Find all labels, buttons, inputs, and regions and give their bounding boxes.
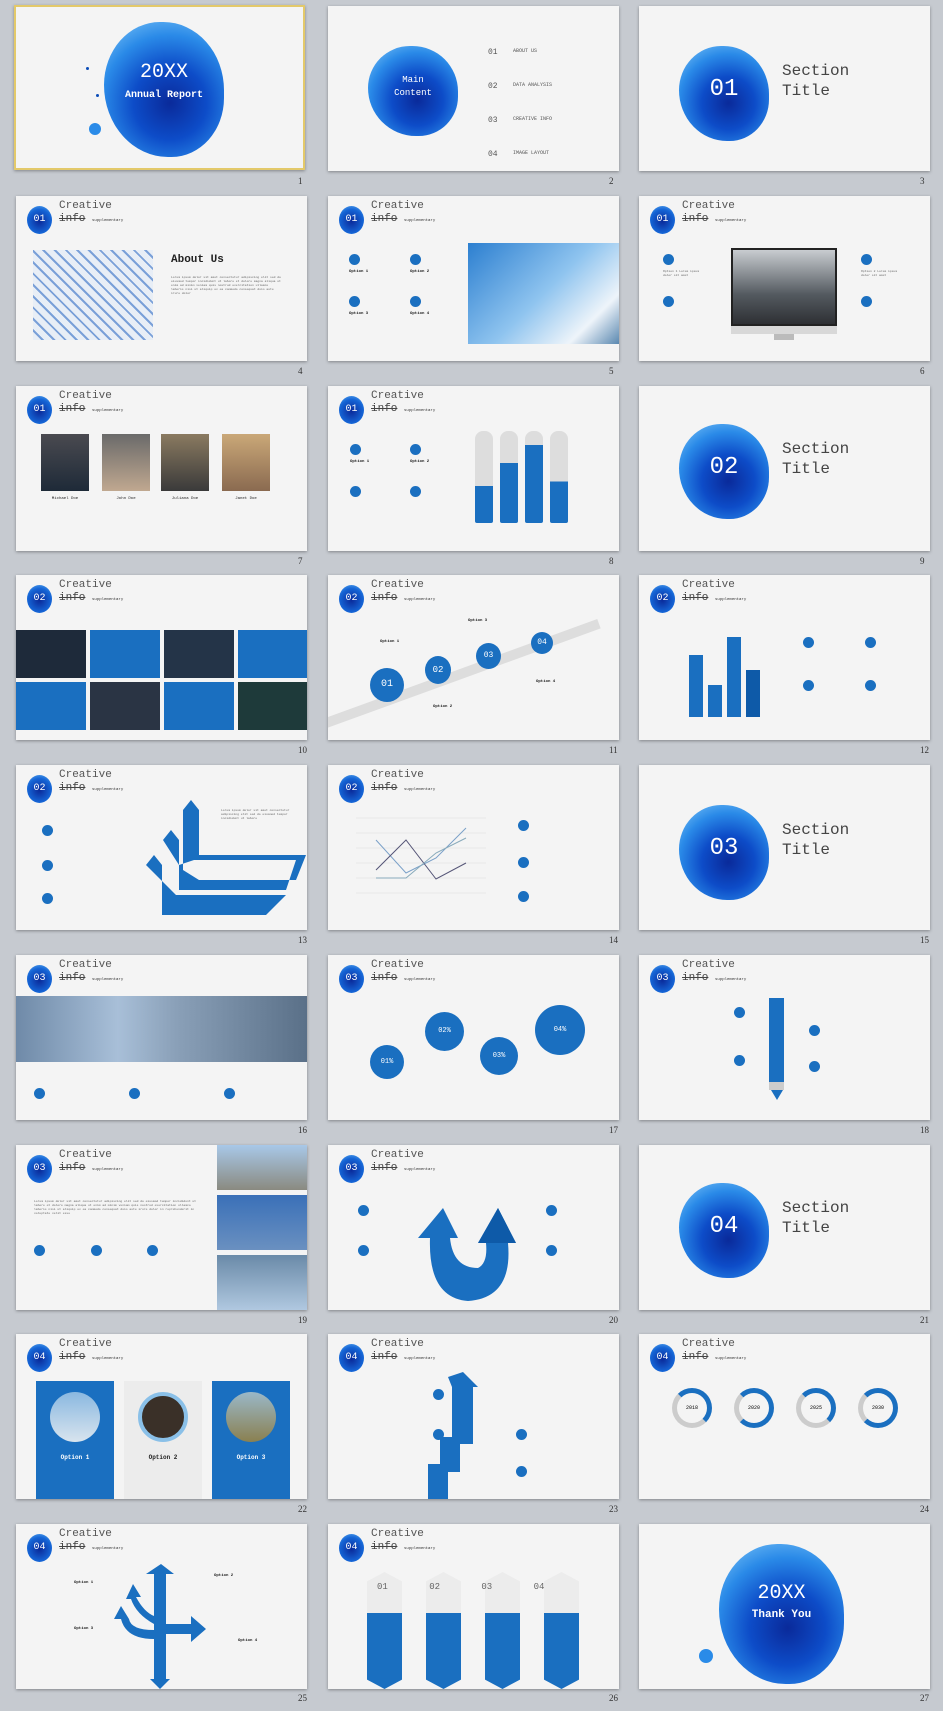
slide 5: info supplementary <box>371 213 435 225</box>
text: 6 <box>920 366 924 376</box>
slide 14: line chart: info supplementary <box>371 782 435 794</box>
slide 18: pencil <box>639 955 930 1120</box>
slide 12: bar chart: 02 <box>656 593 668 604</box>
text: 11 <box>609 745 618 755</box>
contents list <box>488 48 498 159</box>
slide 23: stairs: Creative <box>371 1338 424 1350</box>
text: 22 <box>298 1504 307 1514</box>
slide 24: rings <box>639 1334 930 1499</box>
slide 20: circular arrow: Creative <box>371 1149 424 1161</box>
slide 17: percentage blobs: 01% <box>381 1058 393 1066</box>
slide 22: cards: Creative <box>59 1338 112 1350</box>
slide 24: rings: Creative <box>682 1338 735 1350</box>
contents list: 04 <box>488 150 498 159</box>
title text: 20XX <box>140 61 188 84</box>
slide 25: pencil arrows: info supplementary <box>59 1541 123 1553</box>
text: 25 <box>298 1693 307 1703</box>
slide 20: circular arrow <box>328 1145 619 1310</box>
names: Michael Doe <box>52 497 78 501</box>
slide 11: timeline circles: Option 1 <box>380 640 399 644</box>
slide 26: banners: Creative <box>371 1528 424 1540</box>
blob head <box>104 22 224 157</box>
slide 11: timeline circles: Option 2 <box>433 705 452 709</box>
slide 7: info supplementary <box>59 403 123 415</box>
slide 22: cards: Option 1 <box>61 1454 89 1461</box>
slide 10: photo grid: info supplementary <box>59 592 123 604</box>
slide 2: contents: DATA ANALYSIS <box>513 82 552 88</box>
slide 3: section 01: Section <box>782 62 849 80</box>
text: 3 <box>920 176 924 186</box>
slide 5: Option 2 <box>410 270 429 274</box>
slide 13: arrows: 02 <box>33 783 46 794</box>
slide 19: info supplementary <box>59 1162 123 1174</box>
slide 8: 01 <box>345 404 358 415</box>
slide 21: section 04: Title <box>782 1219 830 1237</box>
slide 4: About Us <box>171 254 224 266</box>
text: 17 <box>609 1125 618 1135</box>
slide 18: pencil: Creative <box>682 959 735 971</box>
slide 8 <box>328 386 619 551</box>
slide 24: rings: info supplementary <box>682 1351 746 1363</box>
slide 26: banners <box>328 1524 619 1689</box>
slide 22: cards: info supplementary <box>59 1351 123 1363</box>
slide 3: section 01: Title <box>782 82 830 100</box>
slide 13: arrows: Creative <box>59 769 112 781</box>
slide 7: Janet Doe <box>235 497 257 501</box>
slide 11: timeline circles: Creative <box>371 579 424 591</box>
slide 5: Option 3 <box>349 312 368 316</box>
slide 7: Creative <box>59 390 112 402</box>
slide 13: arrows: info supplementary <box>59 782 123 794</box>
slide 4: info supplementary <box>59 213 123 225</box>
slide 12: bar chart <box>639 575 930 740</box>
text: 4 <box>298 366 302 376</box>
slide 2: contents: CREATIVE INFO <box>513 116 552 122</box>
slide 1: cover <box>14 5 305 170</box>
slide 8: Option 2 <box>410 460 429 464</box>
slide 17: percentage blobs: 03 <box>345 973 358 984</box>
slide 5: Option 1 <box>349 270 368 274</box>
slide 10: photo grid: Creative <box>59 579 112 591</box>
slide 11: timeline circles: 03 <box>484 651 493 660</box>
slide 10: photo grid: 02 <box>33 593 46 604</box>
slide 21: section 04: 04 <box>710 1213 738 1240</box>
slide 17: percentage blobs: Creative <box>371 959 424 971</box>
slide 4: Lorem ipsum dolor sit amet consectetur adipiscing elit sed do eiusmod tempor incididunt ut labore et dolore magna aliqua ut enim ad minim veniam quis nostrud exercitation ullamco laboris nisi ut aliquip ex ea commodo consequat duis aute irure dolor <box>171 276 281 295</box>
slide 1: cover: Annual Report <box>125 90 203 101</box>
slide 8: info supplementary <box>371 403 435 415</box>
slide 7: 01 <box>33 404 46 415</box>
slide 25: pencil arrows: Option 3 <box>74 1627 93 1631</box>
text: 16 <box>298 1125 307 1135</box>
slide 16: building photo: 03 <box>33 973 46 984</box>
slide 22: cards: 04 <box>33 1352 46 1363</box>
slide 19: 03 <box>33 1163 46 1174</box>
slide 6 <box>639 196 930 361</box>
text: 13 <box>298 935 307 945</box>
slide 9: section 02: Section <box>782 440 849 458</box>
slide 19: Lorem ipsum dolor sit amet consectetur adipiscing elit sed do eiusmod tempor incididunt ut labore et dolore magna aliqua ut enim ad minim veniam quis nostrud exercitation ullamco laboris nisi ut aliquip ex ea commodo consequat duis aute irure dolor in reprehenderit in voluptate velit esse <box>34 1200 196 1215</box>
text: 5 <box>609 366 614 376</box>
text: 9 <box>920 556 924 566</box>
slide 14: line chart: Creative <box>371 769 424 781</box>
slide 11: timeline circles: Option 4 <box>536 680 555 684</box>
text: 27 <box>920 1693 929 1703</box>
slide 4: 01 <box>33 214 46 225</box>
slide 7 <box>16 386 307 551</box>
text: 14 <box>609 935 618 945</box>
slide 12: bar chart: info supplementary <box>682 592 746 604</box>
slide 15: section 03 <box>639 765 930 930</box>
slide 25: pencil arrows: Option 2 <box>214 1574 233 1578</box>
slide 23: stairs <box>328 1334 619 1499</box>
slide 20: circular arrow: info supplementary <box>371 1162 435 1174</box>
slide 14: line chart <box>328 765 619 930</box>
text: 15 <box>920 935 929 945</box>
slide 23: stairs: info supplementary <box>371 1351 435 1363</box>
contents list: 03 <box>488 116 498 125</box>
text: 2 <box>609 176 614 186</box>
contents list: 02 <box>488 82 498 91</box>
slide 19: Creative <box>59 1149 112 1161</box>
slide 18: pencil: 03 <box>656 973 668 984</box>
slide 21: section 04: Section <box>782 1199 849 1217</box>
slide 23: stairs: 04 <box>345 1352 358 1363</box>
slide 24: rings: 2018 <box>686 1405 698 1411</box>
slide 17: percentage blobs: 04% <box>554 1026 566 1034</box>
slide 22: cards <box>16 1334 307 1499</box>
slide 7: John Doe <box>116 497 136 501</box>
slide 3: section 01 <box>639 6 930 171</box>
slide 16: building photo: Creative <box>59 959 112 971</box>
slide 25: pencil arrows: Option 4 <box>238 1639 257 1643</box>
slide 6: Creative <box>682 200 735 212</box>
slide 4 <box>16 196 307 361</box>
cylinder bars <box>475 431 493 523</box>
slide 25: pencil arrows: Creative <box>59 1528 112 1540</box>
text: 12 <box>920 745 929 755</box>
text: 23 <box>609 1504 618 1514</box>
keyboard image <box>33 250 153 340</box>
slide 9: section 02: 02 <box>710 454 738 481</box>
slide 8: Option 1 <box>350 460 369 464</box>
slide 4: Creative <box>59 200 112 212</box>
slide 2: contents: Content <box>394 88 432 98</box>
slide 27: thank you: Thank You <box>752 1609 811 1621</box>
slide 20: circular arrow: 03 <box>345 1163 358 1174</box>
slide 19 <box>16 1145 307 1310</box>
slide 26: banners: 01 02 03 04 <box>377 1582 544 1592</box>
contents list: 01 <box>488 48 498 57</box>
slide 2: contents: IMAGE LAYOUT <box>513 150 549 156</box>
slide 16: building photo <box>16 955 307 1120</box>
slide 3: section 01: 01 <box>710 76 738 103</box>
slide 2: contents: ABOUT US <box>513 48 537 54</box>
slide 11: timeline circles: 02 <box>433 665 443 675</box>
text: 18 <box>920 1125 929 1135</box>
slide 2: contents <box>328 6 619 171</box>
slide 22: cards: Option 2 <box>149 1454 177 1461</box>
slide 25: pencil arrows <box>16 1524 307 1689</box>
slide 9: section 02 <box>639 386 930 551</box>
slide 6: 01 <box>656 214 668 225</box>
text: 7 <box>298 556 302 566</box>
slide 12: bar chart: Creative <box>682 579 735 591</box>
slide 15: section 03: Section <box>782 821 849 839</box>
slide 6: Option 2 Lorem ipsum dolor sit amet <box>861 270 897 277</box>
slide 11: timeline circles: 01 <box>381 679 393 690</box>
slide 17: percentage blobs <box>328 955 619 1120</box>
slide 18: pencil: info supplementary <box>682 972 746 984</box>
slide 5: Creative <box>371 200 424 212</box>
slide 17: percentage blobs: 03% <box>493 1052 505 1060</box>
slide 26: banners: 04 <box>345 1542 358 1553</box>
slide 6: info supplementary <box>682 213 746 225</box>
text: 21 <box>920 1315 929 1325</box>
slide 11: timeline circles: 04 <box>537 638 547 647</box>
slide 24: rings: 2030 <box>872 1405 884 1411</box>
slide 15: section 03: 03 <box>710 835 738 862</box>
slide 8: Creative <box>371 390 424 402</box>
slide 27: thank you <box>639 1524 930 1689</box>
text: 10 <box>298 745 307 755</box>
slide 26: banners: info supplementary <box>371 1541 435 1553</box>
slide 24: rings: 2020 <box>748 1405 760 1411</box>
slide 11: timeline circles: 02 <box>345 593 358 604</box>
text: 8 <box>609 556 614 566</box>
slide 13: arrows: Lorem ipsum dolor sit amet consectetur adipiscing elit sed do eiusmod tempor incididunt ut labore <box>221 809 289 820</box>
slide 21: section 04 <box>639 1145 930 1310</box>
slide 15: section 03: Title <box>782 841 830 859</box>
slide 5: 01 <box>345 214 358 225</box>
text: 1 <box>298 176 302 186</box>
slide 25: pencil arrows: Option 1 <box>74 1581 93 1585</box>
text: 26 <box>609 1693 618 1703</box>
slide 2: contents: Main <box>402 75 424 85</box>
slide 27: thank you: 20XX <box>757 1582 806 1605</box>
slide 16: building photo: info supplementary <box>59 972 123 984</box>
slide 5: Option 4 <box>410 312 429 316</box>
text: 19 <box>298 1315 307 1325</box>
text: 24 <box>920 1504 929 1514</box>
slide 17: percentage blobs: 02% <box>438 1027 451 1035</box>
slide 10: photo grid <box>16 575 307 740</box>
slide 5 <box>328 196 619 361</box>
slide 22: cards: Option 3 <box>237 1454 265 1461</box>
slide 11: timeline circles: Option 3 <box>468 619 487 623</box>
text: 20 <box>609 1315 618 1325</box>
slide 13: arrows <box>16 765 307 930</box>
slide 24: rings: 04 <box>656 1352 668 1363</box>
slide 24: rings: 2025 <box>810 1405 822 1411</box>
slide 17: percentage blobs: info supplementary <box>371 972 435 984</box>
slide 25: pencil arrows: 04 <box>33 1542 46 1553</box>
monitor <box>731 248 837 326</box>
slide 6: Option 1 Lorem ipsum dolor sit amet <box>663 270 699 277</box>
slide 14: line chart: 02 <box>345 783 358 794</box>
photo sky <box>468 243 619 344</box>
slide 7: Juliana Doe <box>172 497 198 501</box>
slide 11: timeline circles <box>328 575 619 740</box>
slide 11: timeline circles: info supplementary <box>371 592 435 604</box>
slide 9: section 02: Title <box>782 460 830 478</box>
